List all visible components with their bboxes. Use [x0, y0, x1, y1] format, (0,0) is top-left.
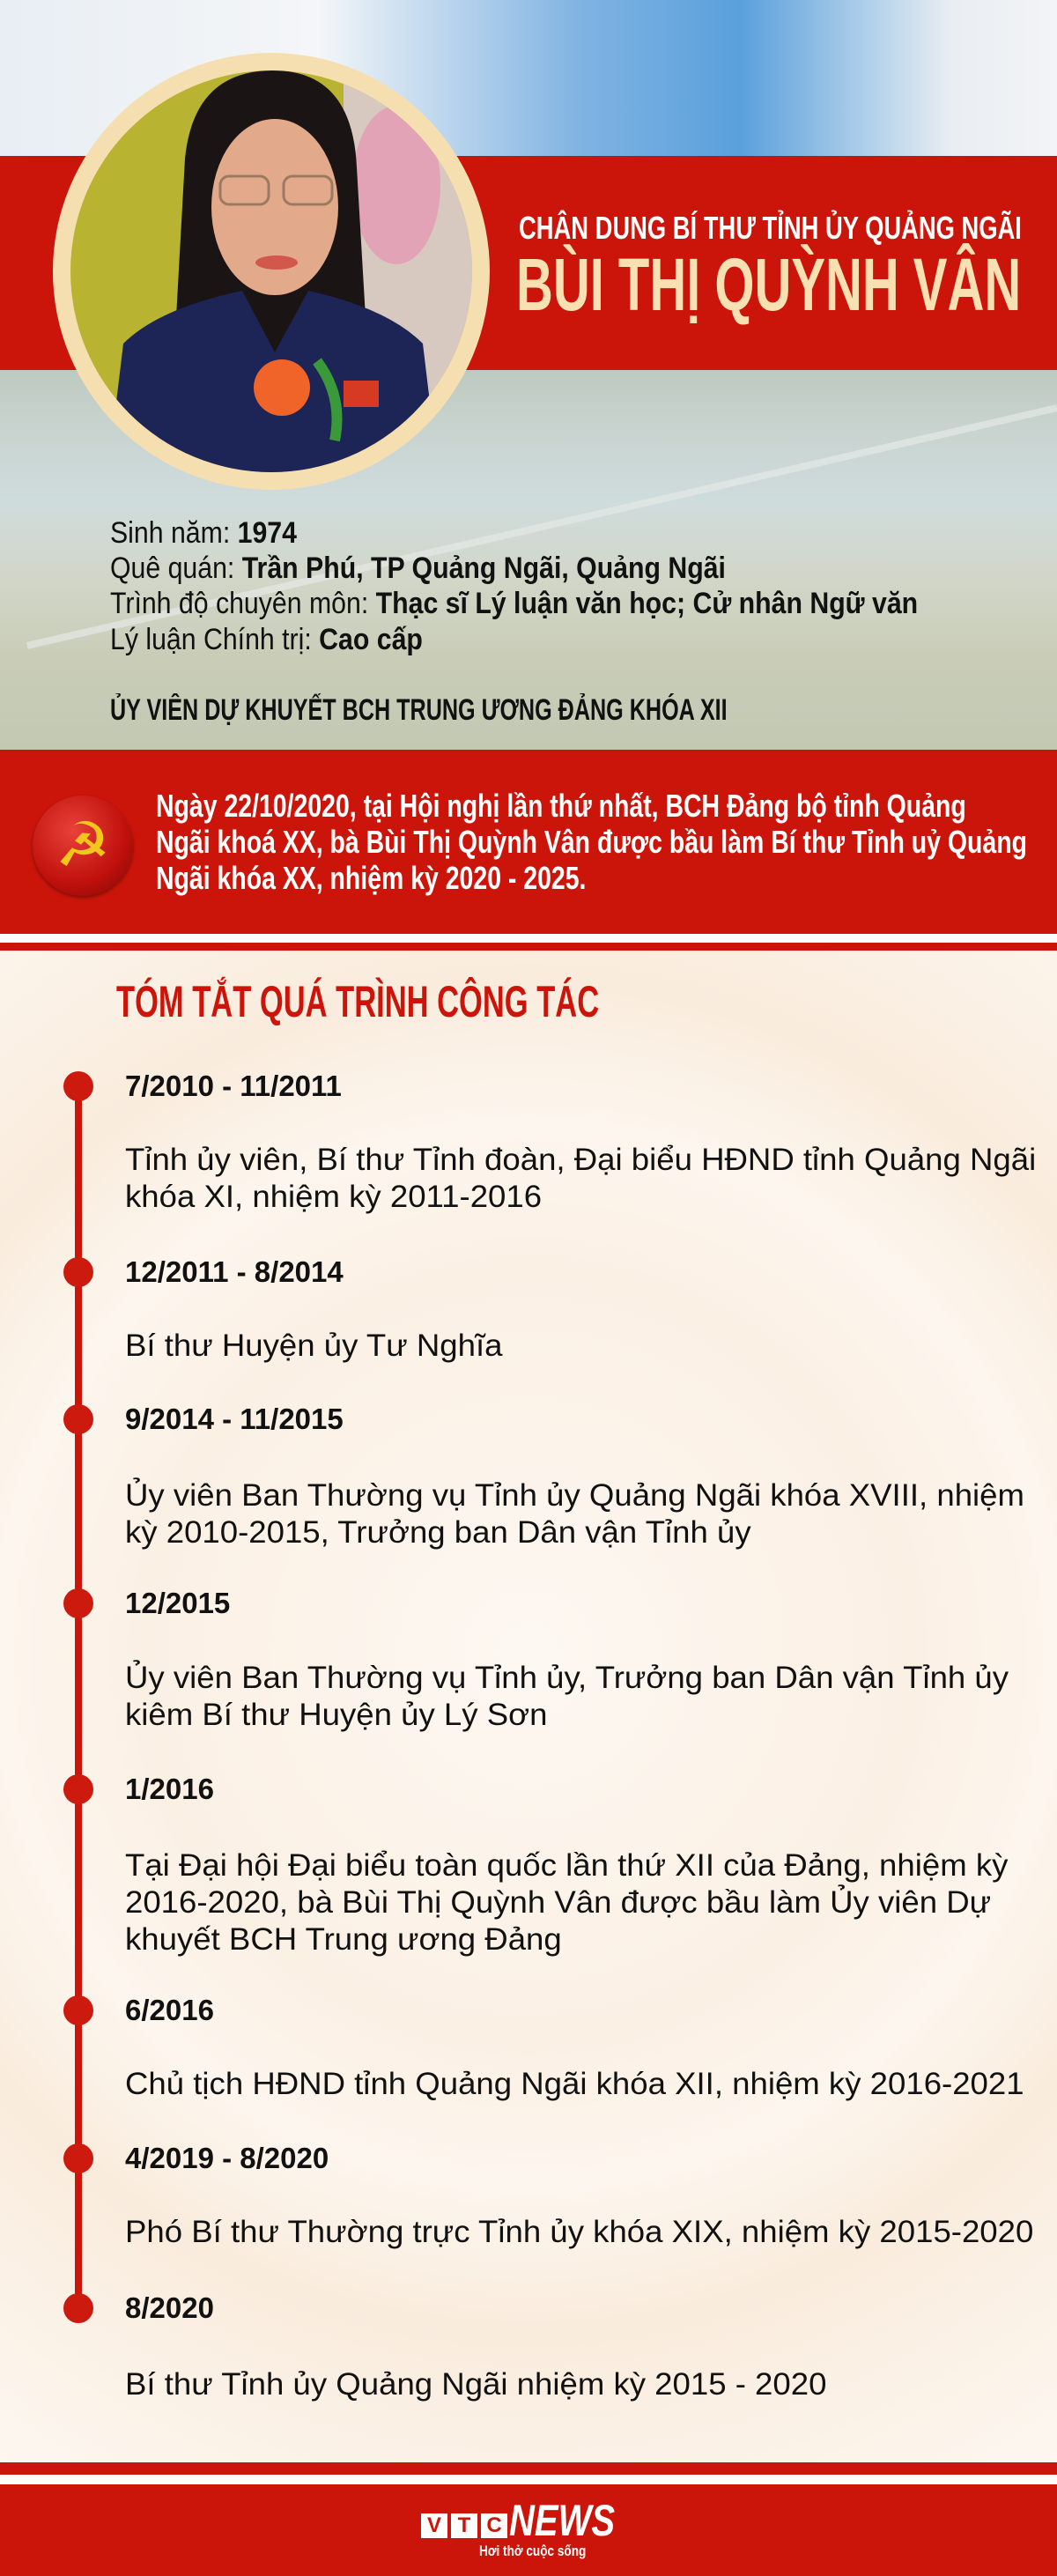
entry 6: Chủ tịch HĐND tỉnh Quảng Ngãi khóa XII, nhiệm kỳ 2016-2021 [125, 2067, 1024, 2101]
logo: VTC NEWS: Hơi thở cuộc sống [479, 2543, 586, 2559]
entry 4: 12/2015 [125, 1587, 230, 1619]
entry 8 [63, 2291, 826, 2402]
announcement text: Ngãi khoá XX, bà Bùi Thị Quỳnh Vân được bầu làm Bí thư Tỉnh uỷ Quảng [156, 824, 1027, 860]
entry 6 [63, 1994, 1024, 2101]
timeline [63, 1070, 1036, 2402]
timeline line [75, 1086, 82, 2308]
bridge [26, 404, 1057, 649]
logo: VTC NEWS [421, 2496, 615, 2559]
announcement text [156, 788, 1027, 896]
entry 2: 12/2011 - 8/2014 [125, 1255, 344, 1288]
entry 1: khóa XI, nhiệm kỳ 2011-2016 [125, 1180, 542, 1214]
logo: VTC NEWS: NEWS [509, 2496, 615, 2545]
icon: party flag [33, 796, 133, 896]
entry 4 [63, 1587, 1009, 1732]
entry 4: Ủy viên Ban Thường vụ Tỉnh ủy, Trưởng ban Dân vận Tỉnh ủy [125, 1661, 1009, 1695]
entry 7 [63, 2142, 1033, 2249]
info: education: Trình độ chuyên môn: Thạc sĩ Lý luận văn học; Cử nhân Ngữ văn [110, 587, 918, 620]
info: membership: ỦY VIÊN DỰ KHUYẾT BCH TRUNG ƯƠNG ĐẢNG KHÓA XII [110, 693, 728, 727]
cream patterned area [0, 951, 1057, 2462]
info block [110, 516, 918, 727]
entry 5: 1/2016 [125, 1773, 214, 1805]
entry 1: Tỉnh ủy viên, Bí thư Tỉnh đoàn, Đại biểu HĐND tỉnh Quảng Ngãi [125, 1143, 1036, 1177]
entry 5: Tại Đại hội Đại biểu toàn quốc lần thứ XII của Đảng, nhiệm kỳ [125, 1848, 1008, 1883]
background: sky photo [0, 0, 1057, 159]
entry 3: kỳ 2010-2015, Trưởng ban Dân vận Tỉnh ủy [125, 1515, 751, 1550]
entry 4: kiêm Bí thư Huyện ủy Lý Sơn [125, 1698, 547, 1732]
entry 5: 2016-2020, bà Bùi Thị Quỳnh Vân được bầu làm Ủy viên Dự [125, 1885, 991, 1920]
footer [0, 2484, 1057, 2576]
info: hometown: Quê quán: Trần Phú, TP Quảng Ngãi, Quảng Ngãi [110, 551, 726, 585]
red title banner [0, 156, 1057, 370]
entry 2: Bí thư Huyện ủy Tư Nghĩa [125, 1329, 502, 1363]
entry 7: 4/2019 - 8/2020 [125, 2142, 329, 2174]
title name: BÙI THỊ QUỲNH VÂN [516, 243, 1021, 326]
entry 7: Phó Bí thư Thường trực Tỉnh ủy khóa XIX, nhiệm kỳ 2015-2020 [125, 2215, 1033, 2249]
entry 1 [63, 1070, 1036, 1214]
portrait circle [53, 53, 490, 490]
entry 5 [63, 1773, 1008, 1957]
logo: VTC NEWS: V [427, 2513, 441, 2537]
entry 2 [63, 1255, 502, 1363]
entry 3: Ủy viên Ban Thường vụ Tỉnh ủy Quảng Ngãi khóa XVIII, nhiệm [125, 1478, 1024, 1513]
background: landscape photo [0, 369, 1057, 750]
entry 5: khuyết BCH Trung ương Đảng [125, 1922, 562, 1957]
entry 6: 6/2016 [125, 1994, 214, 2026]
entry 3 [63, 1403, 1024, 1550]
section heading: TÓM TẮT QUÁ TRÌNH CÔNG TÁC [116, 977, 599, 1026]
entry 3: 9/2014 - 11/2015 [125, 1403, 344, 1435]
red announcement band [0, 750, 1057, 934]
entry 8: 8/2020 [125, 2291, 214, 2324]
logo: VTC NEWS: C [486, 2513, 502, 2537]
icon: party flag: ☭ [55, 809, 110, 881]
title line 1: CHÂN DUNG BÍ THƯ TỈNH ỦY QUẢNG NGÃI [519, 210, 1022, 246]
info: political theory: Lý luận Chính trị: Cao cấp [110, 623, 423, 656]
entry 8: Bí thư Tỉnh ủy Quảng Ngãi nhiệm kỳ 2015 - 2020 [125, 2367, 826, 2402]
announcement text: Ngãi khóa XX, nhiệm kỳ 2020 - 2025. [156, 860, 586, 896]
announcement text: Ngày 22/10/2020, tại Hội nghị lần thứ nhất, BCH Đảng bộ tỉnh Quảng [156, 788, 966, 824]
logo: VTC NEWS: T [458, 2513, 470, 2537]
info: birth year: Sinh năm: 1974 [110, 516, 297, 550]
entry 1: 7/2010 - 11/2011 [125, 1070, 342, 1102]
